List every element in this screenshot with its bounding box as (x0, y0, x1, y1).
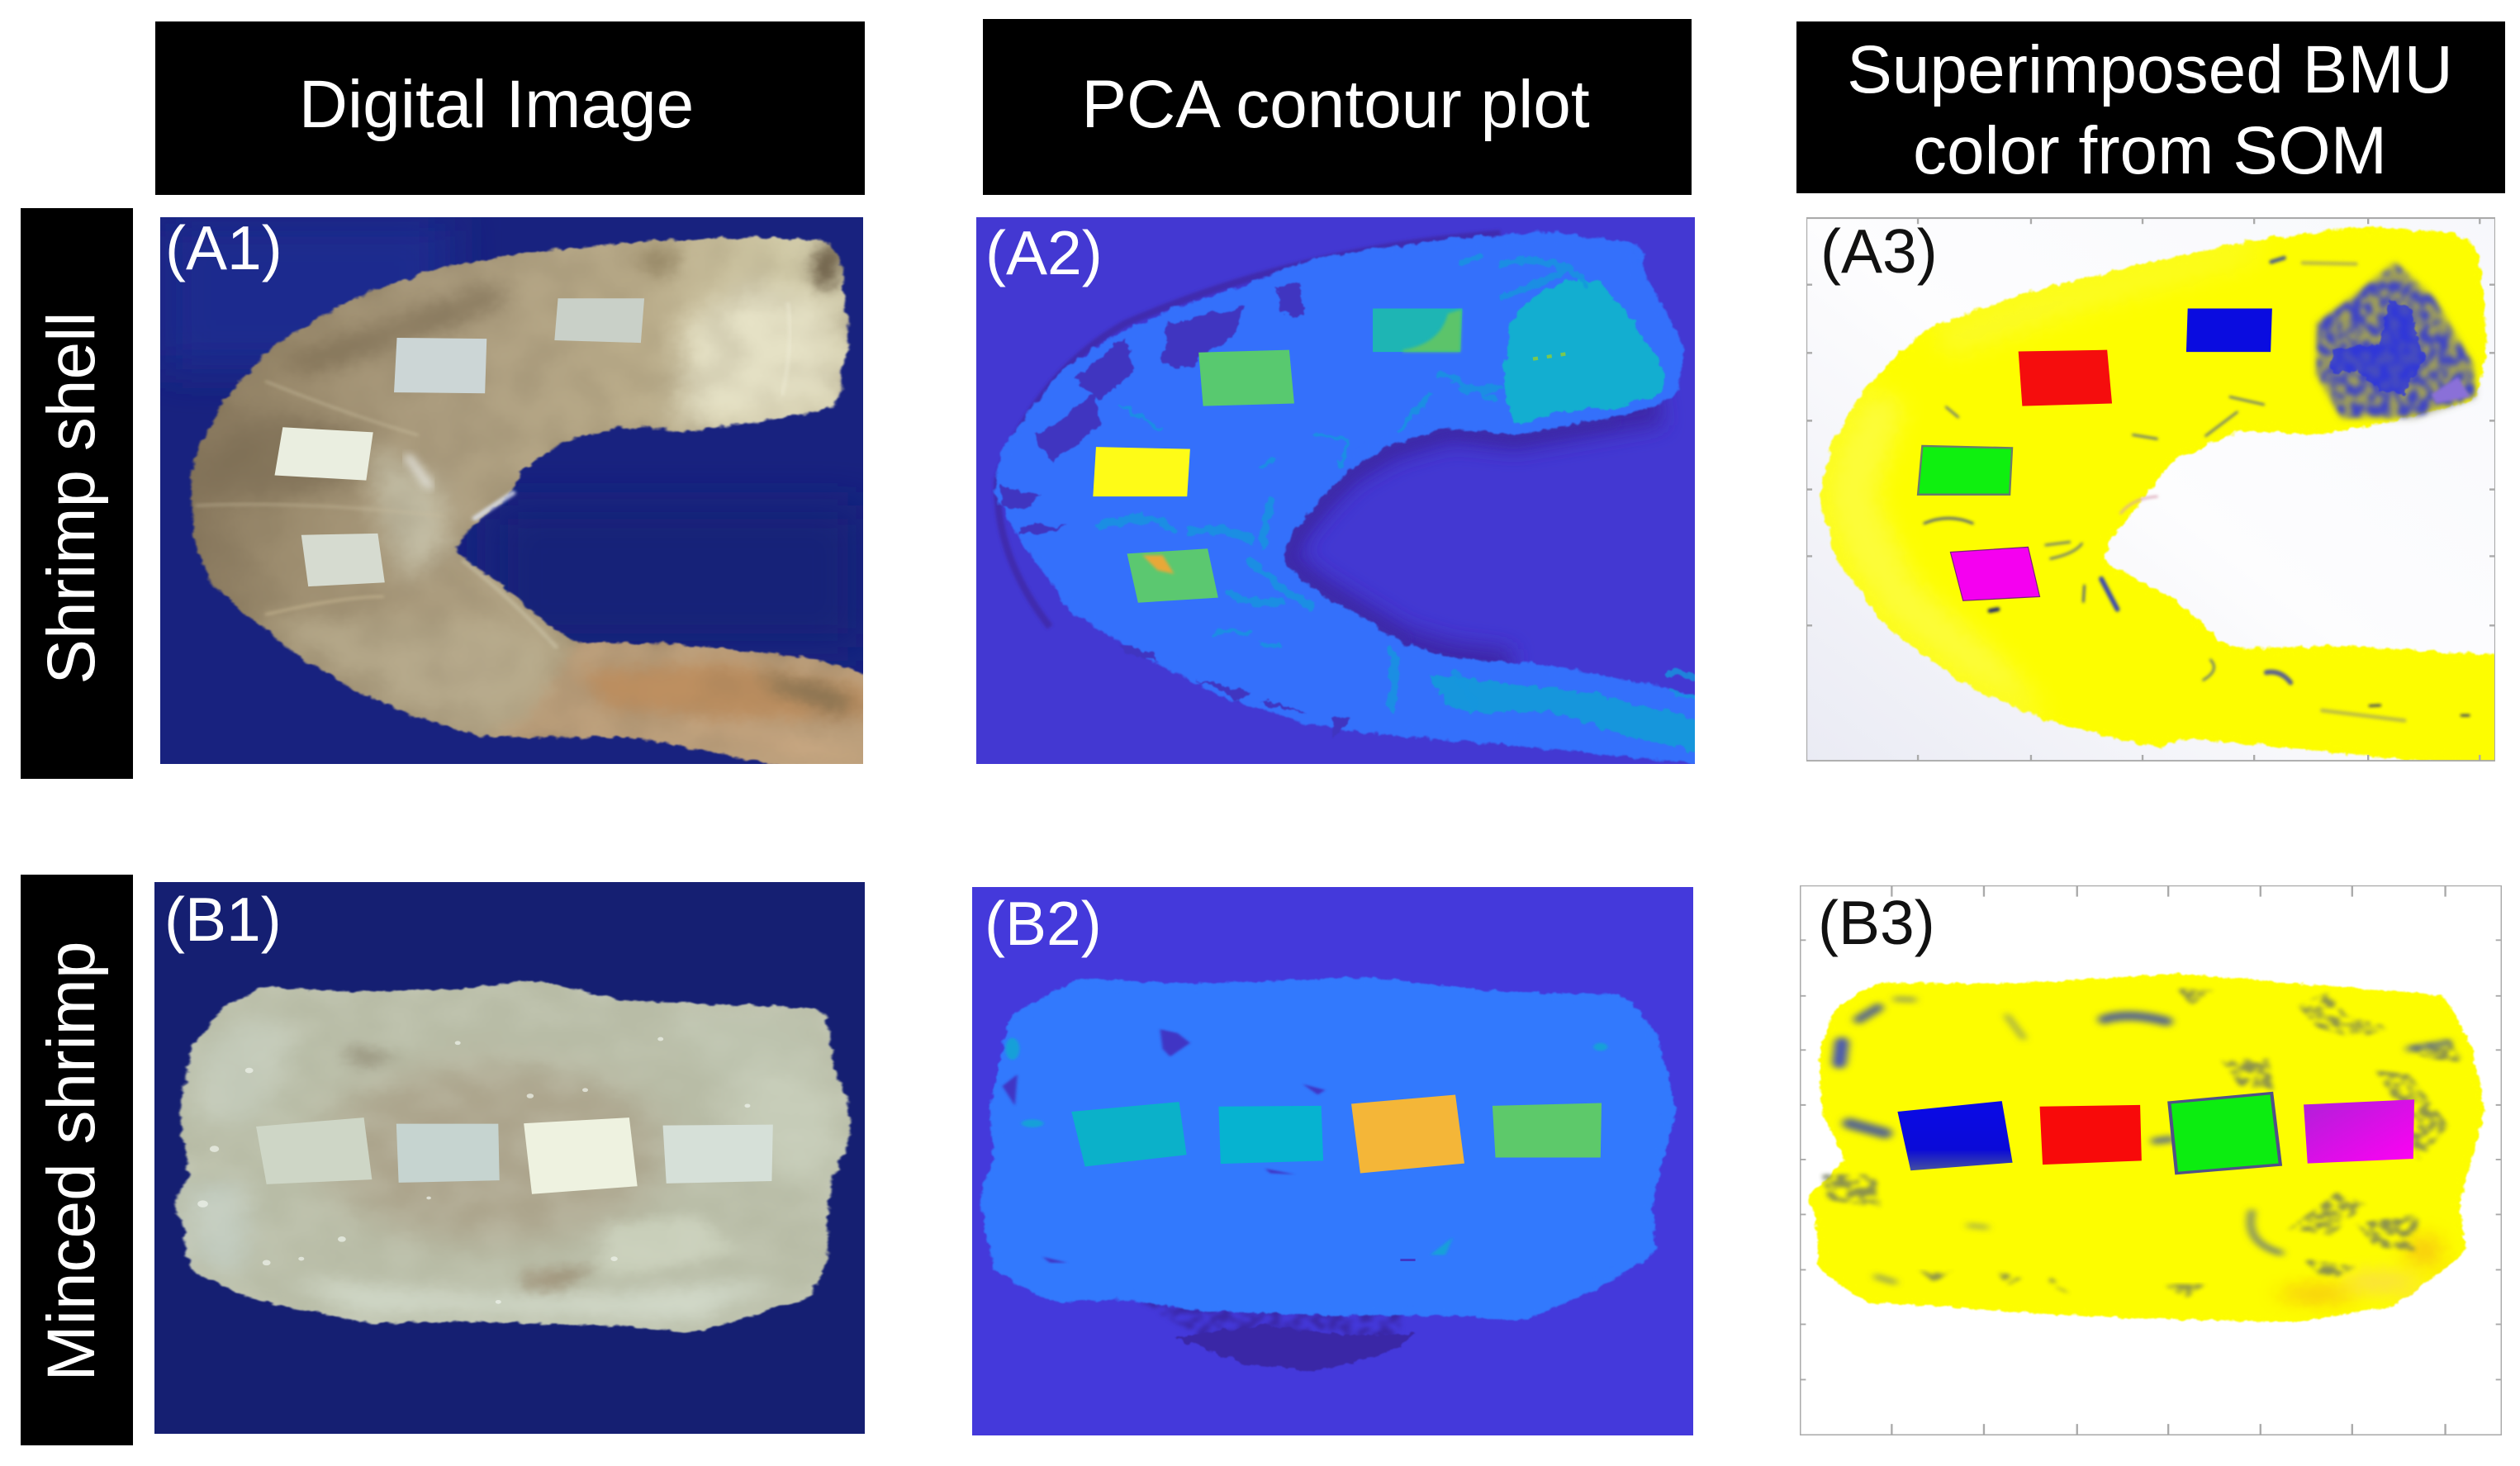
shrimp body (185, 237, 927, 771)
speckled band under mince (1140, 1298, 1400, 1337)
header: Superimposed BMU color from SOM: Superimposed BMU (1847, 32, 2453, 107)
panel B3: superimposed BMU map of minced shrimp (1800, 885, 2502, 1435)
panel A1: digital image of shrimp shell (160, 217, 863, 764)
label B3: (B3) (1818, 888, 1935, 957)
header: Digital Image (155, 21, 865, 195)
header: Superimposed BMU color from SOM (1796, 21, 2505, 193)
dark inner shadow (1275, 405, 1661, 670)
label B1: (B1) (164, 885, 282, 954)
label A3: (A3) (1820, 216, 1938, 286)
row label: Minced shrimp: Minced shrimp (34, 941, 109, 1382)
contour body (995, 231, 1751, 769)
blue cluster on head (2318, 263, 2475, 417)
grey olive clusters (1822, 988, 2465, 1298)
header: PCA contour plot (983, 19, 1692, 195)
small dark marks (1003, 1029, 1416, 1263)
row label: Shrimp shell (21, 208, 133, 779)
sparkles (197, 1037, 750, 1304)
panel B1: digital image of minced shrimp (154, 882, 865, 1434)
header: PCA contour plot: PCA contour plot (1081, 67, 1590, 142)
teal streaks (1100, 255, 1696, 708)
header: Superimposed BMU color from SOM: color from SOM (1913, 113, 2387, 188)
panel A2: PCA contour plot of shrimp shell (976, 217, 1751, 769)
white reference patches (275, 298, 644, 586)
BMU patches (1918, 308, 2272, 600)
shell highlights (197, 303, 790, 648)
small teal marks (1005, 1038, 1607, 1255)
header: Digital Image: Digital Image (299, 67, 694, 142)
label B2: (B2) (985, 889, 1102, 958)
coloured patches (1093, 308, 1565, 603)
teal regions (1431, 279, 1701, 753)
axis frame and ticks (1800, 885, 2502, 1435)
axis frame and ticks (1806, 218, 2495, 761)
row label: Minced shrimp (21, 875, 133, 1445)
dark crescent (1175, 1326, 1418, 1371)
dark fragments (1000, 283, 1350, 738)
label A2: (A2) (985, 218, 1103, 287)
dark specks (1924, 258, 2469, 720)
panel B2: PCA contour plot of minced shrimp (972, 887, 1693, 1435)
contour body (979, 977, 1677, 1321)
yellow body (1820, 227, 2520, 771)
dark outer arc (997, 234, 1501, 627)
coloured patches (1071, 1095, 1602, 1174)
white reference patches (256, 1117, 773, 1194)
label A1: (A1) (165, 213, 282, 282)
blue grey marks (1839, 999, 2448, 1283)
row label: Shrimp shell: Shrimp shell (34, 311, 109, 685)
mince body (173, 980, 852, 1332)
BMU patches (1897, 1094, 2414, 1174)
yellow body (1807, 974, 2485, 1322)
panel A3: superimposed BMU map of shrimp shell (1806, 216, 2520, 771)
